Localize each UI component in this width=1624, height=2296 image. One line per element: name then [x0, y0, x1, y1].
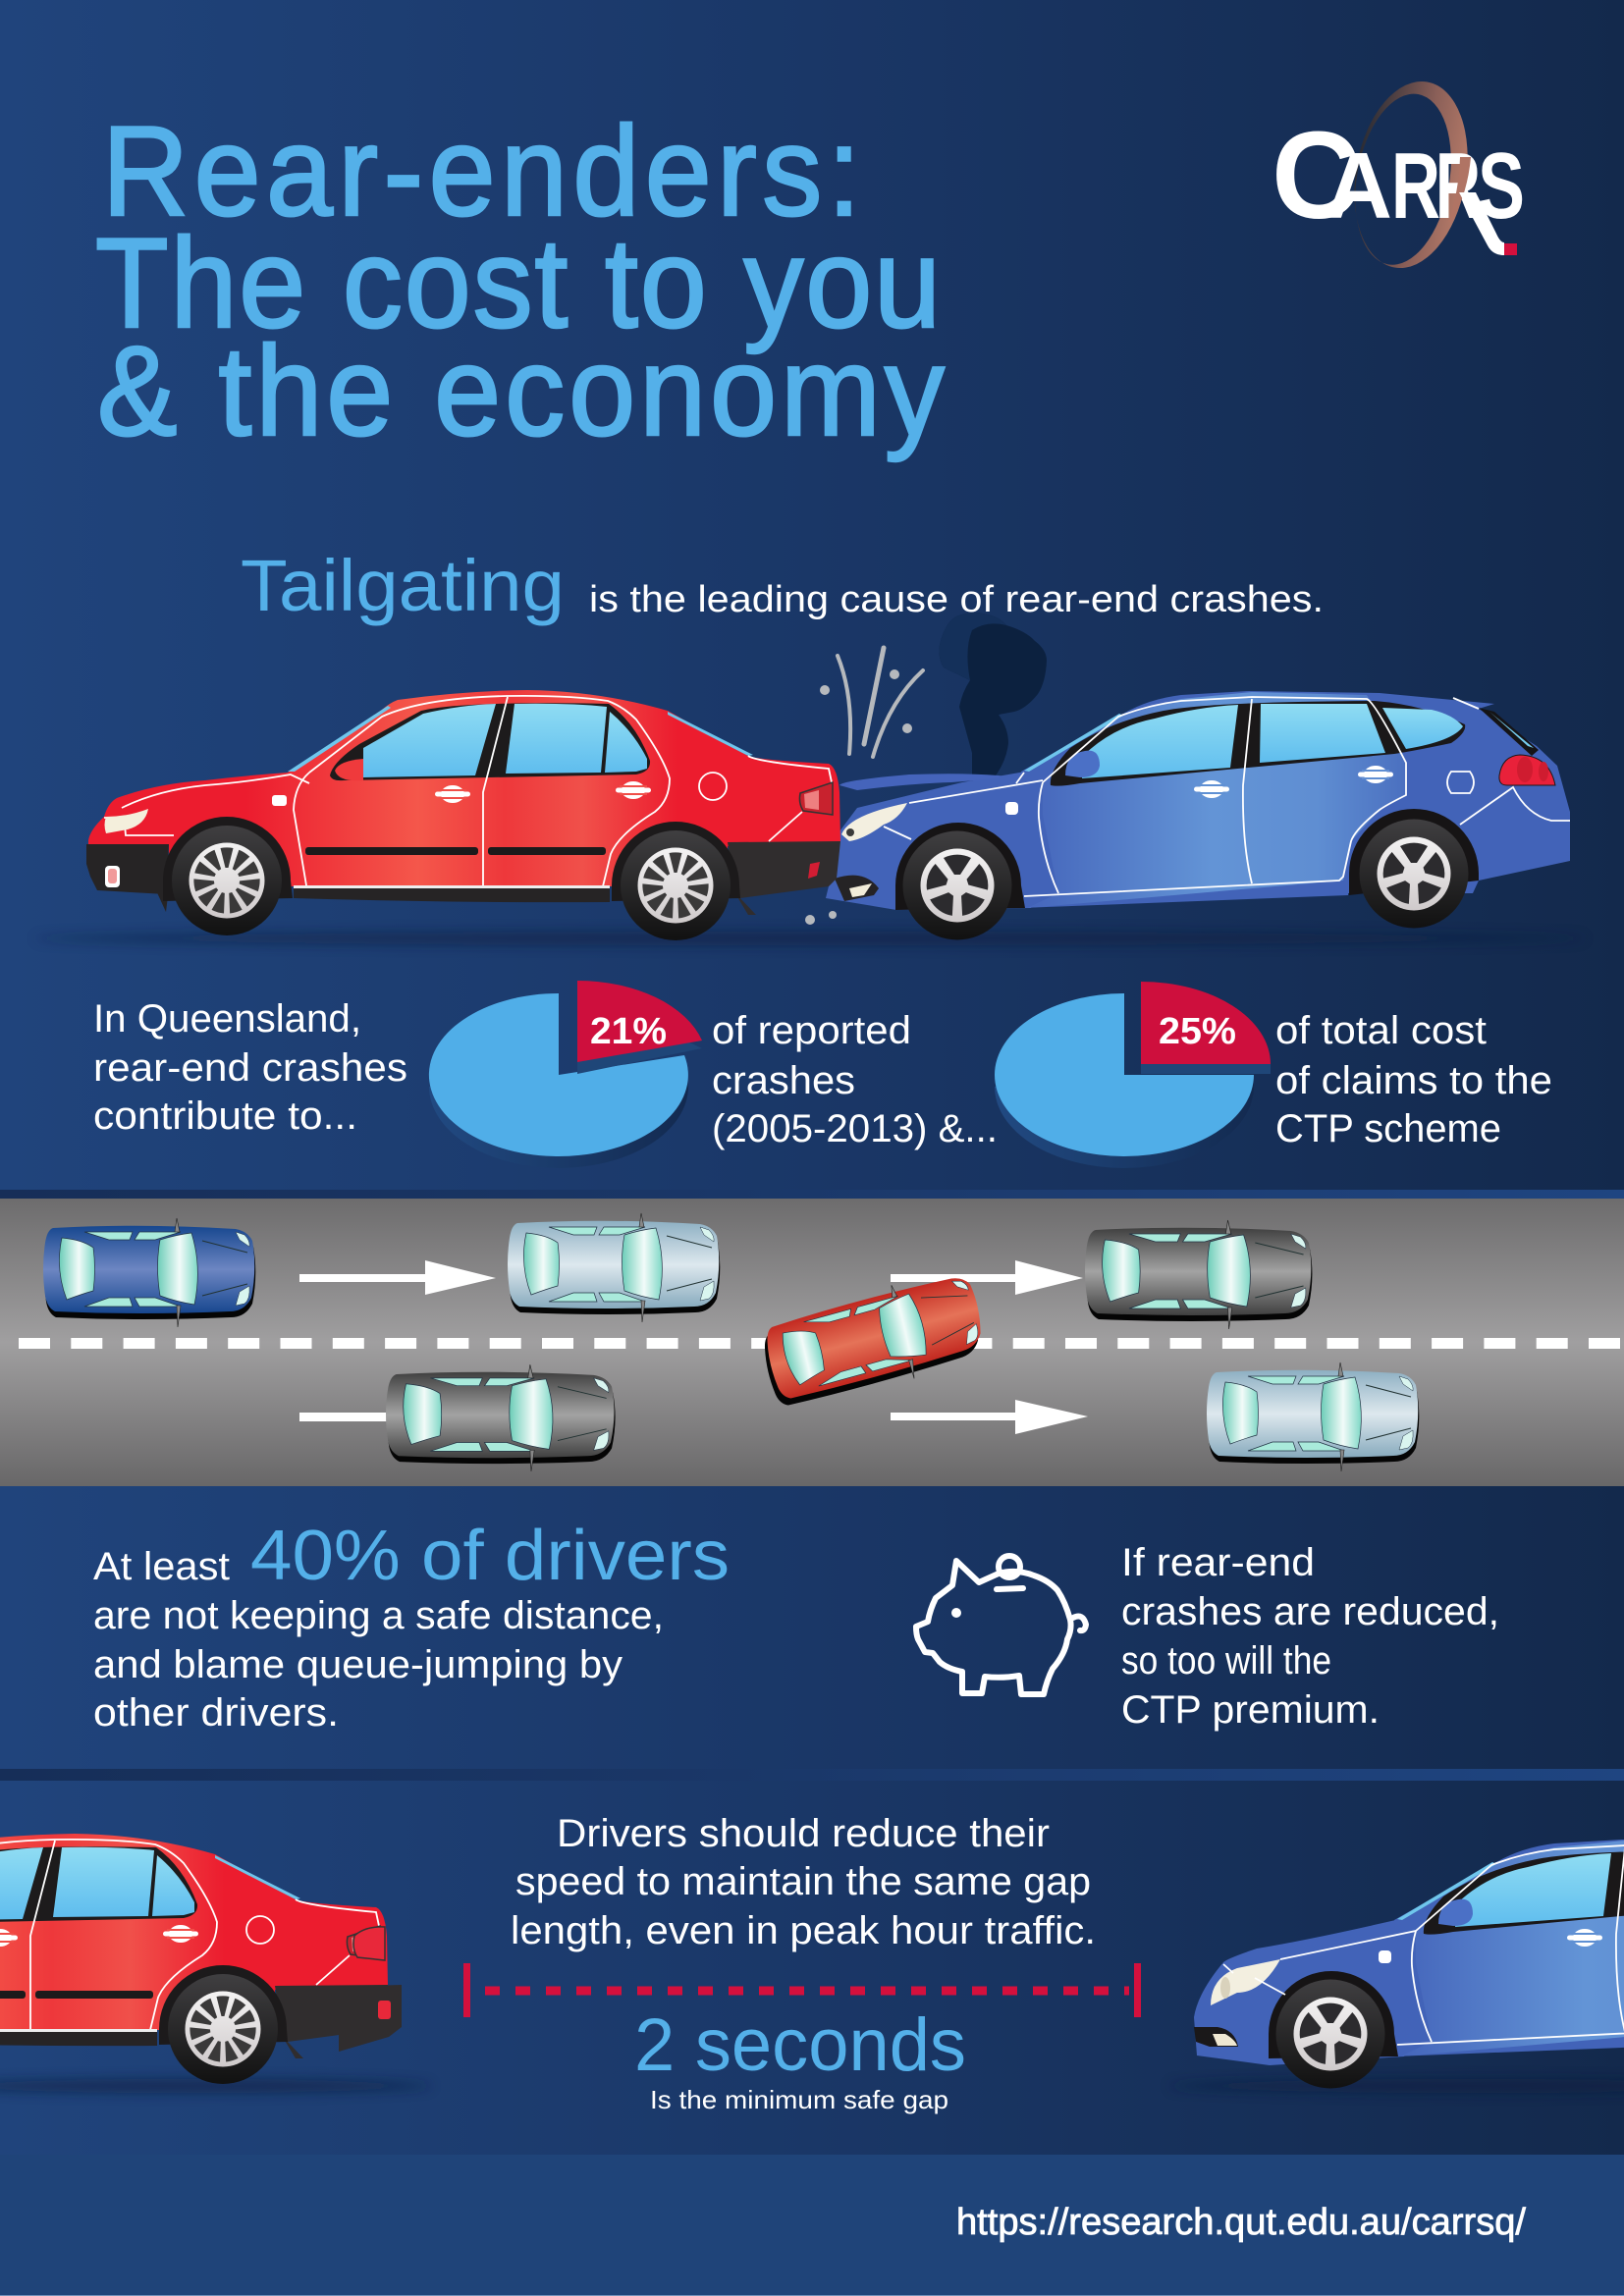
upper separator band: [0, 1190, 1624, 1199]
text: 40% of drivers: At least: [93, 1545, 230, 1588]
road: [0, 1199, 1624, 1486]
text: total cost of claims: of total cost: [1275, 1009, 1487, 1052]
text: total cost of claims: of claims to the: [1275, 1059, 1552, 1102]
pie chart: 21%: 21%: [590, 1011, 667, 1052]
headline: tailgating: Tailgating: [241, 545, 565, 626]
ground shadow: bottom scene left: [0, 2079, 432, 2093]
footer url: https://research.qut.edu.au/carrsq/: [956, 2202, 1526, 2243]
logo: CARRS: A: [1326, 133, 1392, 239]
text: premium reduction: If rear-end: [1121, 1541, 1315, 1584]
top-view car: light blue 2: [1207, 1362, 1419, 1471]
title: & the economy: [97, 320, 945, 462]
logo: CARRS: S: [1478, 133, 1525, 239]
smoke: [939, 613, 1047, 775]
arrow: bottom left: [299, 1413, 390, 1421]
text: premium reduction: [1121, 1541, 1499, 1732]
road lane dashes: [19, 1338, 1624, 1349]
text: reduce speed advice: [511, 1812, 1096, 1952]
pie chart: 21%: [429, 981, 702, 1168]
top-view car: blue: [43, 1218, 255, 1327]
text: 40% of drivers: 40% of drivers: [250, 1517, 730, 1595]
arrow: top right: [891, 1260, 1083, 1295]
red sedan, safe distance: [0, 1834, 402, 2084]
text: reduce speed advice: speed to maintain the same gap: [515, 1860, 1091, 1903]
text: queensland intro: [93, 997, 407, 1138]
pie chart: 25%: [995, 982, 1271, 1168]
text: premium reduction: so too will the: [1121, 1639, 1331, 1682]
blue hatchback, crashed: [826, 691, 1570, 940]
arrow: top left: [299, 1260, 496, 1295]
title: Rear-enders:: [102, 100, 861, 242]
lower separator band: [0, 1769, 1624, 1781]
footer band: [0, 2155, 1624, 2296]
title: The cost to you: [95, 212, 941, 354]
pie chart: 25%: 25%: [1159, 1011, 1236, 1052]
headline: tailgating: is the leading cause of rear-end crashes.: [589, 579, 1324, 620]
top-view car: light blue 1: [508, 1213, 720, 1322]
arrow: bottom right: [891, 1400, 1088, 1434]
text: reduce speed advice: length, even in peak hour traffic.: [511, 1909, 1096, 1952]
headline: tailgating: [241, 545, 1324, 626]
text: total cost of claims: [1275, 1009, 1552, 1150]
icon: piggy bank: [916, 1556, 1086, 1694]
title: [95, 100, 945, 462]
logo: CARRS: C: [1272, 106, 1360, 244]
text: queensland intro: In Queensland,: [93, 997, 361, 1041]
gap measure line: [463, 1963, 1141, 2017]
text: queensland intro: rear-end crashes: [93, 1046, 407, 1090]
text: reported crashes: of reported: [712, 1009, 911, 1052]
text: 40% of drivers: other drivers.: [93, 1691, 339, 1735]
logo: CARRS: R: [1435, 133, 1481, 239]
text: premium reduction: crashes are reduced,: [1121, 1590, 1499, 1633]
logo: CARRS: R: [1391, 133, 1440, 239]
text: minimum safe gap: Is the minimum safe gap: [650, 2085, 948, 2114]
text: 2 seconds: 2 seconds: [634, 2003, 966, 2087]
blue hatchback, safe distance: [1194, 1840, 1624, 2089]
text: reported crashes: (2005-2013) &...: [712, 1107, 998, 1150]
top-view car: grey 1: [1085, 1220, 1312, 1329]
red sedan, crashed: [86, 690, 840, 940]
logo: CARRS: [1272, 73, 1525, 277]
text: reduce speed advice: Drivers should reduce their: [557, 1812, 1050, 1855]
text: 40% of drivers: [93, 1517, 730, 1735]
text: queensland intro: contribute to...: [93, 1095, 357, 1138]
text: reported crashes: crashes: [712, 1059, 855, 1102]
top-view car: red queue-jumper: [757, 1264, 990, 1416]
text: premium reduction: CTP premium.: [1121, 1688, 1380, 1732]
ground shadow: bottom scene right: [1168, 2079, 1624, 2093]
text: total cost of claims: CTP scheme: [1275, 1107, 1501, 1150]
ground shadow under crash cars: [34, 932, 1586, 945]
text: 40% of drivers: are not keeping a safe distance,: [93, 1594, 664, 1637]
crash debris: [805, 648, 923, 925]
text: reported crashes: [712, 1009, 998, 1150]
text: 40% of drivers: and blame queue-jumping by: [93, 1643, 623, 1686]
top-view car: grey 2: [386, 1364, 616, 1471]
